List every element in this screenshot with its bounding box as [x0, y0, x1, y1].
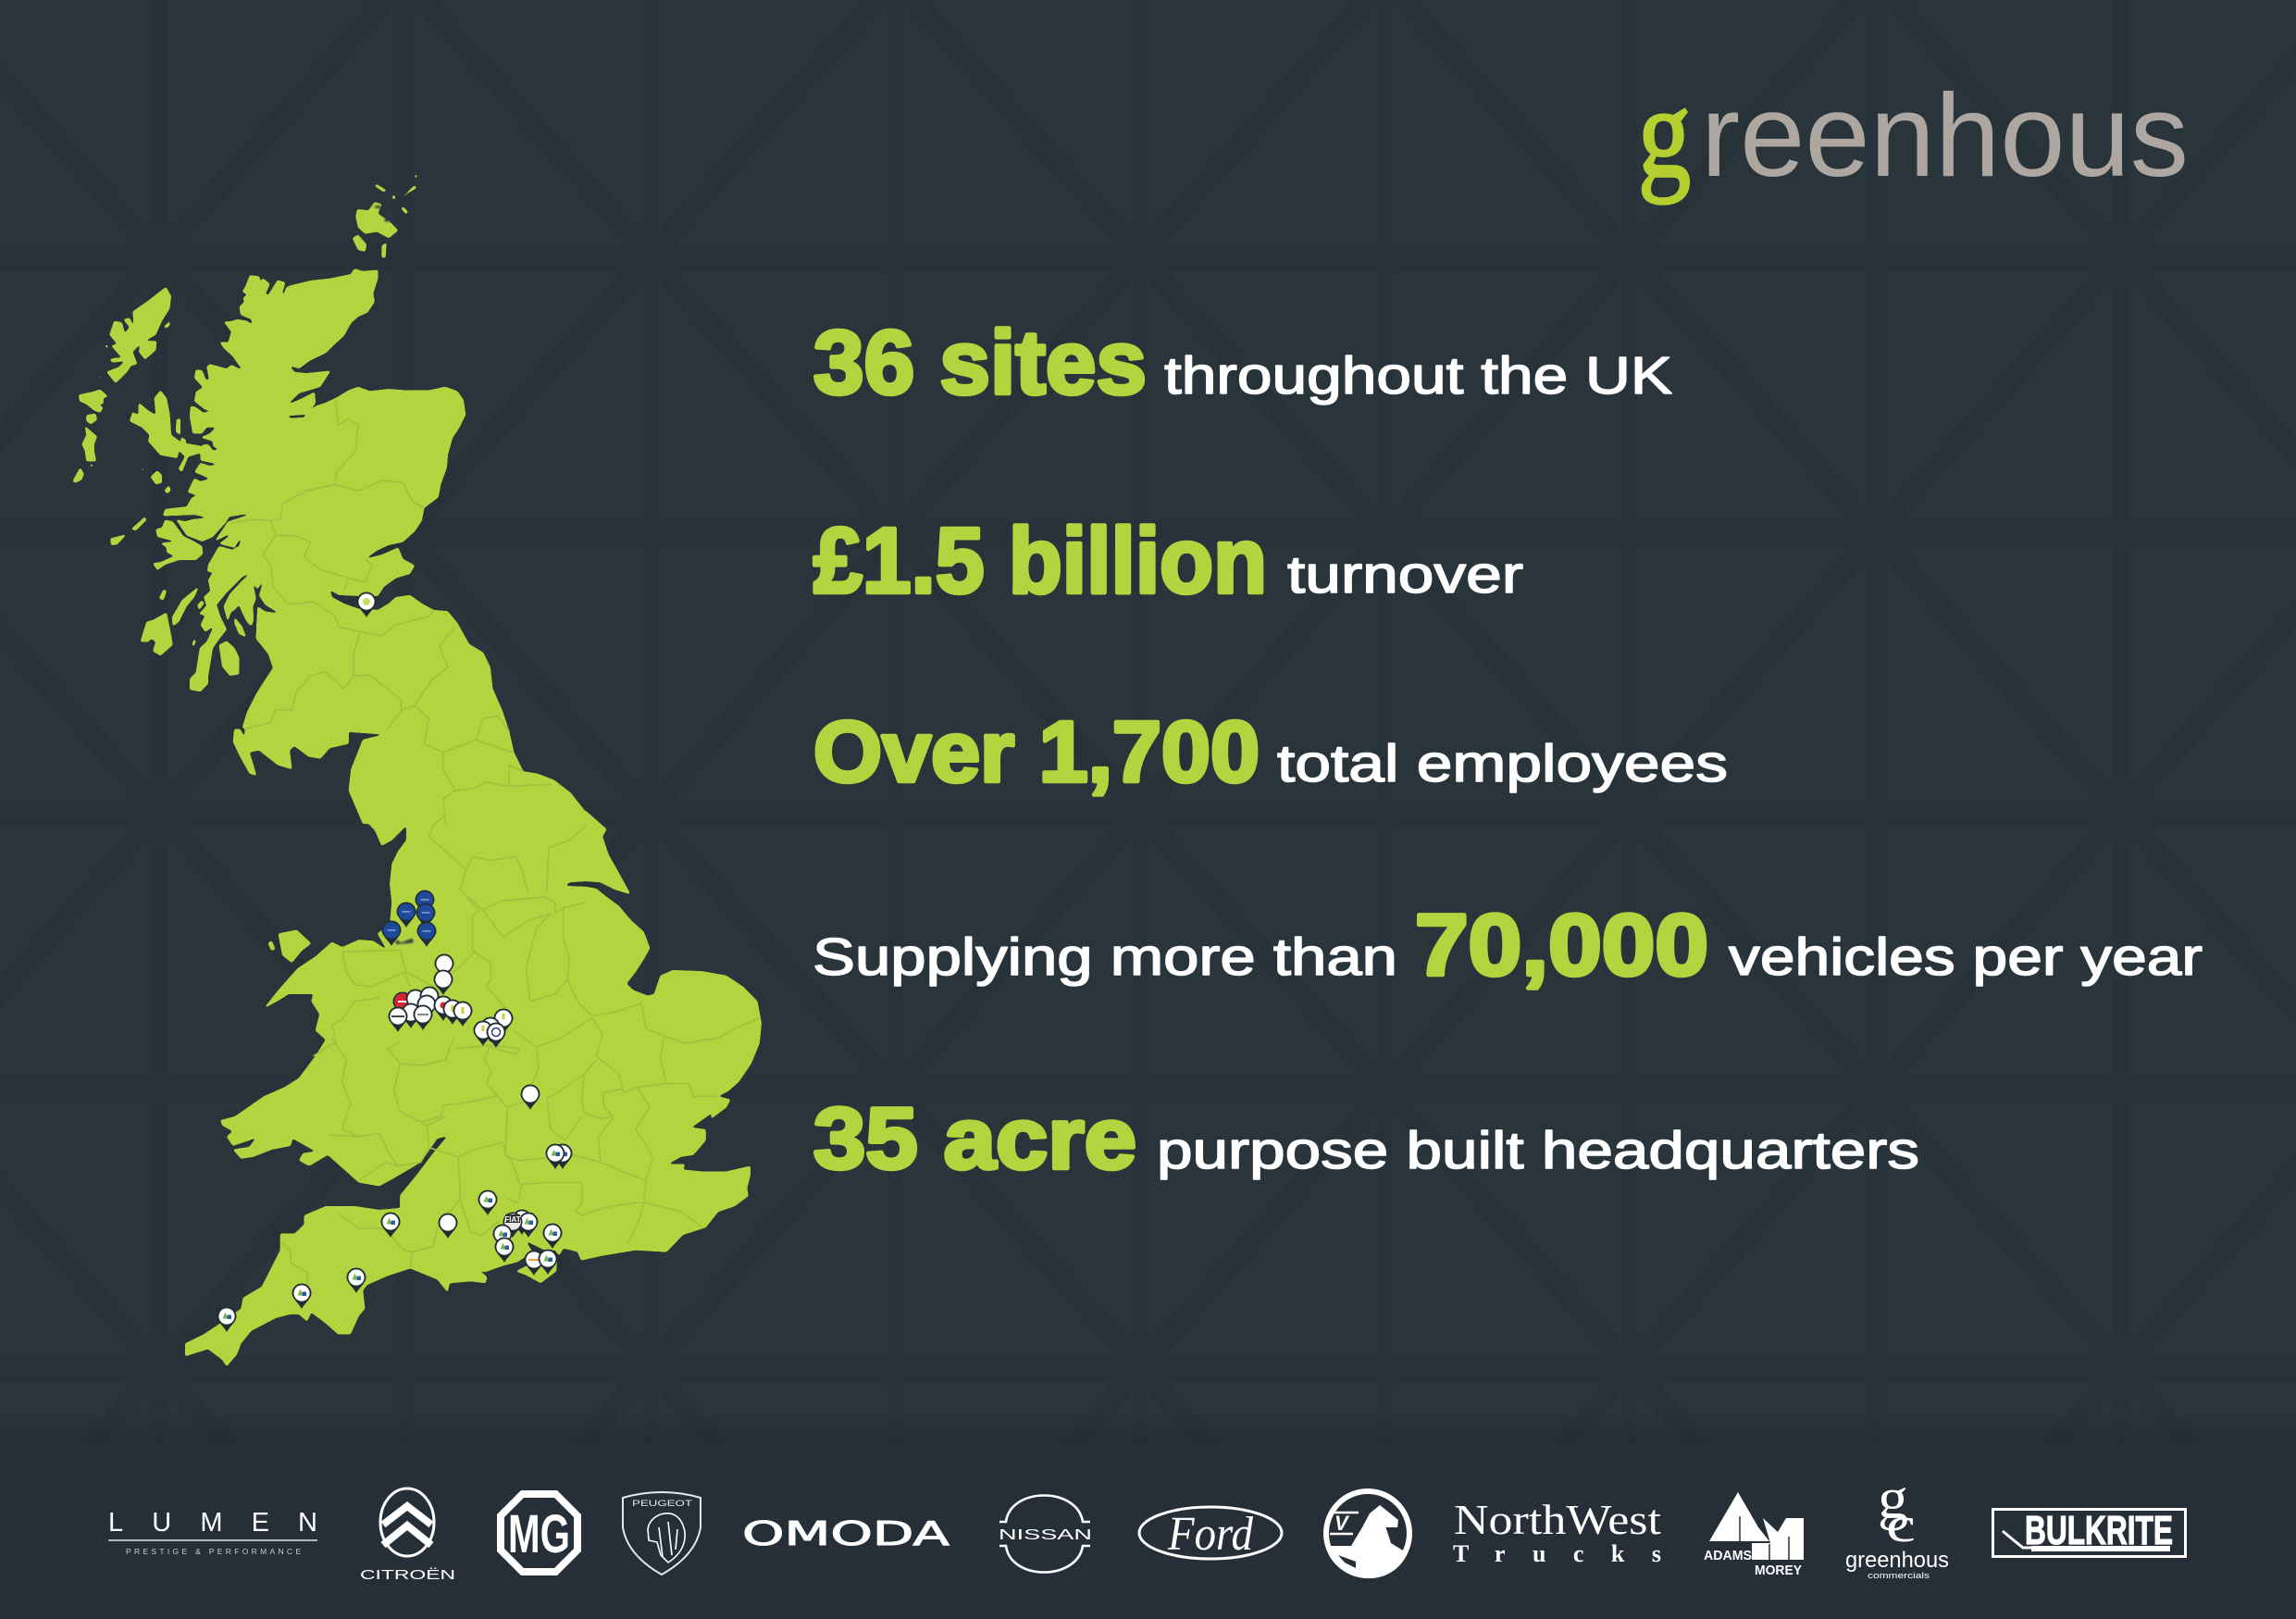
pin: Edinburgh	[357, 592, 376, 617]
stat: 1.5 billion turnover	[813, 509, 1523, 613]
pins: central England	[520, 1085, 572, 1169]
stat: 35 acre headquarters: 35 acre	[813, 1090, 1136, 1187]
stat: 1.5 billion turnover: turnover	[1287, 545, 1523, 604]
logo: Nissan: NISSAN	[999, 1527, 1092, 1543]
map: Scottish region boundaries	[230, 400, 552, 824]
stat: 35 acre headquarters	[813, 1090, 1919, 1187]
stat: 70,000 vehicles: Supplying more than	[813, 928, 1397, 987]
stat: 70,000 vehicles: 70,000	[1415, 896, 1708, 993]
pins: southern England cluster	[381, 1190, 563, 1276]
logo: Adams Morey: MOREY	[1755, 1563, 1802, 1578]
map: north-west Highlands and Hebrides	[66, 275, 293, 545]
logo: Ford: Ford	[1167, 1508, 1254, 1561]
UK map with site pins	[66, 174, 762, 1366]
stat: 70,000 vehicles	[813, 896, 2203, 993]
logo: NorthWest Trucks	[1453, 1496, 1661, 1567]
pins: southern England cluster: FIAT	[504, 1215, 521, 1224]
logo: MG: MG	[508, 1504, 570, 1564]
logo: greenhous commercials: commercials	[1868, 1571, 1930, 1580]
logo: Citroen	[360, 1488, 455, 1583]
map: Argyll, Clyde and inner islands	[141, 491, 305, 729]
logo: NorthWest Trucks: NorthWest	[1454, 1496, 1661, 1543]
stat: 36 sites	[813, 312, 1672, 413]
map: England and Wales	[185, 811, 762, 1366]
logo: greenhous commercials: g	[1878, 1465, 1908, 1531]
logo: Omoda: OMODA	[742, 1515, 950, 1553]
logo: greenhous wordmark: g	[1638, 61, 1691, 205]
logo: greenhous commercials: c	[1886, 1497, 1916, 1552]
logo: Peugeot	[623, 1492, 701, 1575]
stat: 36 sites: throughout the UK	[1164, 346, 1672, 405]
stat: 70,000 vehicles: vehicles per year	[1729, 928, 2203, 987]
pins: South West	[217, 1268, 366, 1332]
stat: 1.5 billion turnover: £1.5 billion	[813, 509, 1267, 613]
stat: over 1,700 employees	[813, 704, 1728, 800]
logo: MG	[497, 1490, 581, 1575]
logo: greenhous commercials	[1845, 1465, 1949, 1580]
logo: NorthWest Trucks: Trucks	[1453, 1540, 1661, 1567]
logo: Vauxhall griffin	[1326, 1491, 1409, 1578]
logo: Vauxhall griffin: V	[1334, 1512, 1350, 1535]
logo: Lumen: LUMEN	[108, 1508, 317, 1538]
logo: Lumen	[108, 1508, 317, 1556]
logo: Adams Morey: ADAMS	[1704, 1548, 1752, 1563]
logo: Ford	[1139, 1507, 1282, 1561]
logo: greenhous commercials: greenhous	[1845, 1548, 1949, 1573]
logo: Lumen: PRESTIGE & PERFORMANCE	[126, 1547, 301, 1556]
map: England and Wales region boundaries	[281, 815, 760, 1290]
map: land mass of Great Britain	[66, 174, 762, 1366]
stat: over 1,700 employees: total employees	[1277, 734, 1728, 793]
logo: Citroen: CITROËN	[360, 1567, 455, 1583]
pins: Staffordshire cluster	[389, 953, 472, 1032]
stat: 36 sites: 36 sites	[813, 312, 1147, 413]
logo: Bulkrite	[1993, 1508, 2186, 1557]
logo: Peugeot: PEUGEOT	[632, 1499, 693, 1508]
logo: Nissan	[999, 1496, 1092, 1572]
logo: Adams Morey	[1704, 1492, 1804, 1578]
logo: Bulkrite: BULKRITE	[2025, 1508, 2173, 1553]
footer: brand logo strip	[0, 1446, 2296, 1619]
map: eastern Scotland and Shetland	[233, 174, 594, 824]
logo: greenhous wordmark: reenhous	[1701, 69, 2189, 201]
stat: 35 acre headquarters: purpose built headquarters	[1157, 1121, 1919, 1180]
pins: North West cluster (blue)	[381, 890, 437, 947]
stat: over 1,700 employees: Over 1,700	[813, 704, 1260, 800]
pins: East Midlands cluster	[474, 1009, 513, 1048]
